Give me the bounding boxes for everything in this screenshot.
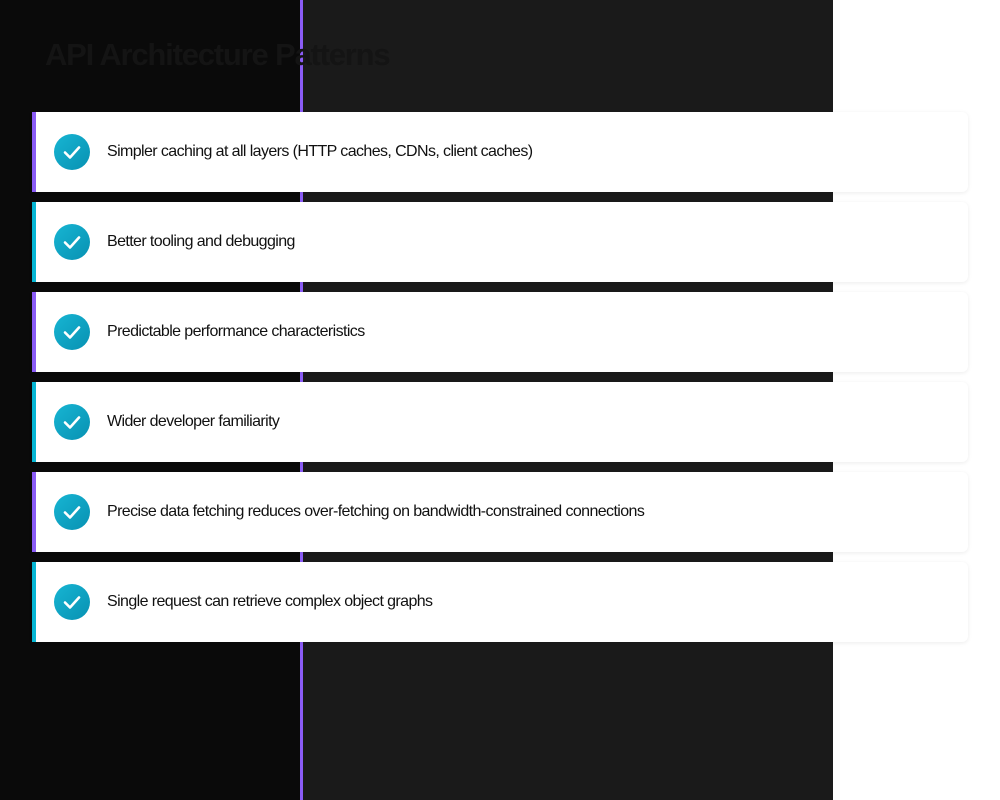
text: Wider developer familiarity xyxy=(107,413,279,430)
text: Predictable performance characteristics xyxy=(107,323,365,340)
text: Single request can retrieve complex object graphs xyxy=(107,593,432,610)
title: API Architecture Patterns xyxy=(45,37,389,72)
icon: check xyxy=(54,404,90,440)
icon: check xyxy=(54,134,90,170)
text: Better tooling and debugging xyxy=(107,233,295,250)
card: data fetching xyxy=(32,472,968,552)
card: caching xyxy=(32,112,968,192)
card: familiarity xyxy=(32,382,968,462)
icon: check xyxy=(54,314,90,350)
card: performance xyxy=(32,292,968,372)
card: tooling xyxy=(32,202,968,282)
icon: check xyxy=(54,494,90,530)
icon: check xyxy=(54,224,90,260)
card: single request xyxy=(32,562,968,642)
text: Simpler caching at all layers (HTTP caches, CDNs, client caches) xyxy=(107,143,532,160)
text: Precise data fetching reduces over-fetching on bandwidth-constrained connections xyxy=(107,503,644,520)
icon: check xyxy=(54,584,90,620)
